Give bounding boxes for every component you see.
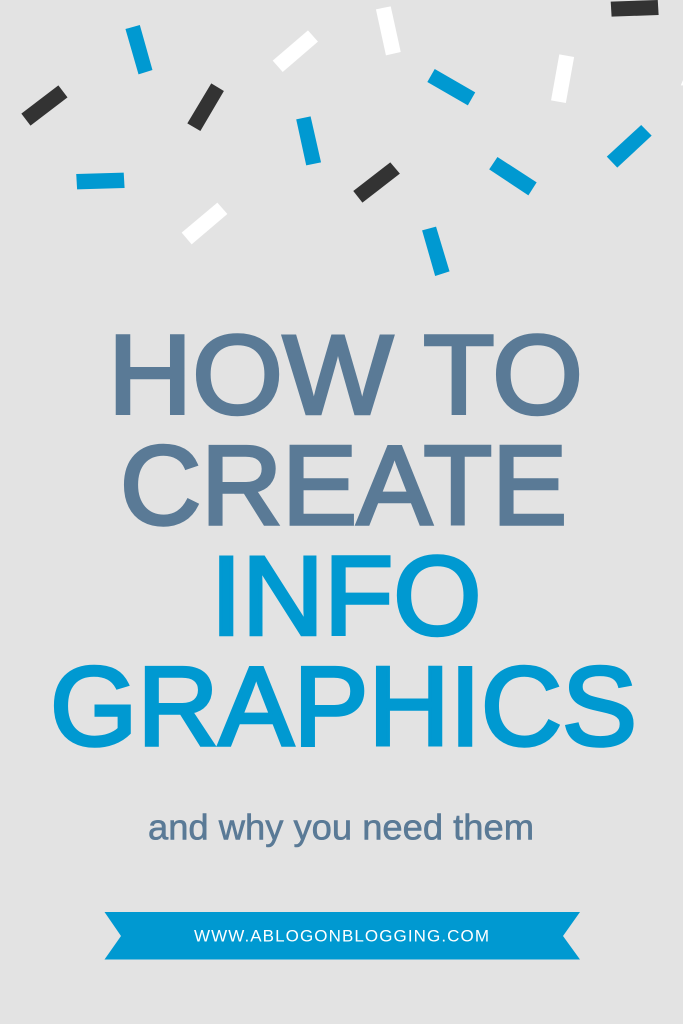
ribbon banner (104, 912, 580, 960)
title line: GRAPHICS: GRAPHICS (50, 643, 637, 769)
website url: WWW.ABLOGONBLOGGING.COM (194, 926, 489, 946)
title (50, 311, 637, 769)
subtitle: and why you need them (148, 806, 534, 847)
ribbon shape (104, 912, 580, 960)
confetti decoration (21, 0, 683, 276)
title line: INFO: INFO (210, 532, 482, 658)
title line: HOW TO: HOW TO (108, 311, 583, 437)
title line: CREATE: CREATE (120, 422, 567, 548)
